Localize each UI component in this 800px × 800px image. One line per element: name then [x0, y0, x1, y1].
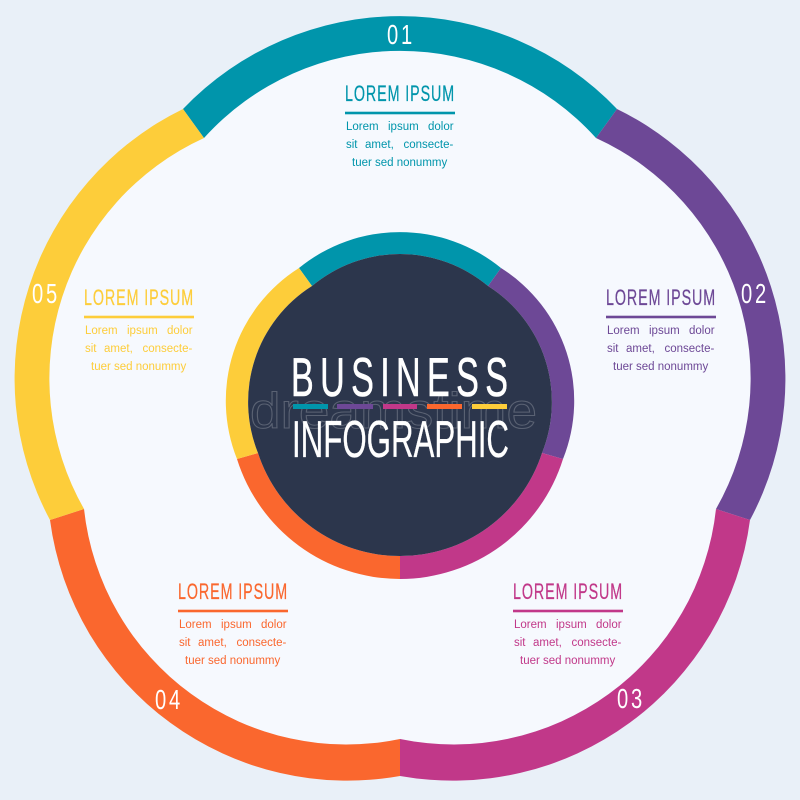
body 01: consecte-	[404, 139, 454, 151]
number 05: 05	[32, 279, 57, 310]
outer segment 04 orange	[50, 509, 400, 781]
body 04: sit	[179, 637, 191, 649]
body 03: ipsum	[556, 619, 587, 631]
rule 04	[178, 610, 288, 612]
rule 03	[513, 610, 623, 612]
body 05: dolor	[167, 325, 193, 337]
title: business: BUSINESS	[291, 347, 508, 408]
center segment orange	[237, 453, 400, 579]
body 02: ipsum	[649, 325, 680, 337]
body 01: amet,	[365, 139, 394, 151]
outer segment 01 teal	[183, 16, 617, 138]
body 03: dolor	[596, 619, 622, 631]
title: infographic: INFOGRAPHIC	[292, 411, 509, 469]
body 03: tuer sed nonummy	[520, 655, 615, 667]
body 04: amet,	[198, 637, 227, 649]
center segment magenta	[400, 453, 563, 579]
body 02: amet,	[626, 343, 655, 355]
body 05: sit	[85, 343, 97, 355]
body 05: tuer sed nonummy	[91, 361, 186, 373]
body 03: Lorem	[514, 619, 547, 631]
outer segment 02 purple	[596, 109, 785, 520]
number 02: 02	[741, 279, 766, 310]
center dark disc	[248, 254, 552, 556]
center segment yellow	[226, 268, 312, 459]
body 01: dolor	[428, 121, 454, 133]
body 02: dolor	[689, 325, 715, 337]
heading 05: LOREM IPSUM	[84, 285, 193, 310]
number 01: 01	[387, 20, 412, 51]
body 04: consecte-	[236, 637, 287, 649]
heading 02: LOREM IPSUM	[606, 285, 715, 310]
outer segment 03 magenta	[400, 509, 750, 781]
text block 01	[345, 81, 455, 169]
bar purple	[337, 404, 373, 409]
watermark: dreamstime	[250, 383, 537, 439]
center segment teal	[299, 232, 501, 286]
body 05: consecte-	[142, 343, 193, 355]
text block 03	[513, 579, 623, 667]
body 01: sit	[346, 139, 358, 151]
body 05: Lorem	[85, 325, 118, 337]
center segment purple	[488, 268, 574, 459]
heading 04: LOREM IPSUM	[178, 579, 287, 604]
body 01: tuer sed nonummy	[352, 157, 447, 169]
body 04: dolor	[261, 619, 287, 631]
body 01: ipsum	[388, 121, 419, 133]
number 03: 03	[617, 684, 642, 715]
body 03: consecte-	[572, 637, 622, 649]
body 02: tuer sed nonummy	[613, 361, 708, 373]
number 04: 04	[155, 685, 180, 716]
body 03: amet,	[533, 637, 562, 649]
rule 01	[345, 112, 455, 114]
title color bars	[293, 404, 507, 409]
body 05: ipsum	[127, 325, 158, 337]
rule 05	[84, 316, 194, 318]
rule 02	[606, 316, 716, 318]
bar orange	[427, 404, 462, 409]
body 03: sit	[514, 637, 526, 649]
body 02: consecte-	[664, 343, 715, 355]
body 02: sit	[607, 343, 619, 355]
body 04: ipsum	[221, 619, 252, 631]
bar teal	[293, 404, 328, 409]
text block 05	[84, 285, 194, 373]
body 04: tuer sed nonummy	[185, 655, 280, 667]
center ring	[226, 232, 574, 579]
heading 01: LOREM IPSUM	[345, 81, 454, 106]
heading 03: LOREM IPSUM	[513, 579, 622, 604]
body 05: amet,	[104, 343, 133, 355]
bar yellow	[472, 404, 507, 409]
text block 04	[178, 579, 288, 667]
outer segment 05 yellow	[15, 109, 204, 520]
body 04: Lorem	[179, 619, 212, 631]
text block 02	[606, 285, 716, 373]
body 01: Lorem	[346, 121, 379, 133]
bar magenta	[383, 404, 417, 409]
body 02: Lorem	[607, 325, 640, 337]
panel: inner flower fill	[49, 51, 751, 744]
